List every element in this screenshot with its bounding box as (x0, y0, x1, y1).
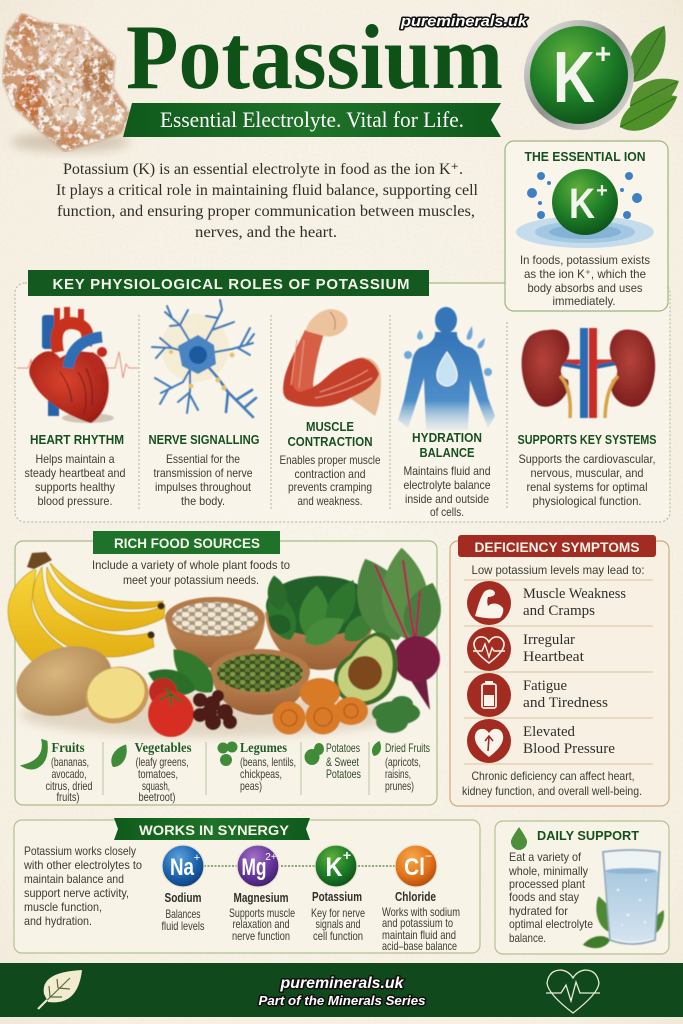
element: magnesium: relaxation and (232, 917, 290, 931)
element: potassium: K (326, 852, 343, 882)
element: sodium (162, 845, 204, 933)
icon: K+ sphere on water: + (596, 180, 608, 202)
role: heart rhythm: HEART RHYTHM (30, 432, 124, 447)
icon: K+ badge with leaves: + (595, 38, 611, 69)
spinach bowl (265, 610, 376, 670)
icon: green drop (511, 827, 527, 850)
element: chloride: Works with sodium (382, 905, 460, 919)
role: nerve signalling: impulses throughout (155, 480, 252, 494)
food group: dried fruits: Dried Fruits (385, 741, 430, 755)
panel: works in synergy (14, 818, 480, 953)
symptom: elevated blood pressure: Elevated (523, 724, 576, 740)
icon: footer heart ECG (546, 970, 600, 1013)
element: sodium: Balances (166, 907, 200, 921)
element: sodium: Na (170, 854, 195, 881)
symptom: elevated blood pressure (467, 719, 615, 763)
raisins (193, 690, 237, 730)
synergy text: and hydration. (24, 914, 92, 928)
symptom: irregular heartbeat (467, 627, 584, 671)
element: potassium: Potassium (312, 890, 362, 904)
intro paragraph: function, and ensuring proper communication between muscles, (57, 203, 475, 220)
daily support text: Eat a variety of (509, 850, 582, 864)
food group: legumes: Legumes (240, 741, 287, 756)
food group: legumes: (beans, lentils, (240, 755, 296, 769)
food group: potatoes: Potatoes (326, 741, 360, 755)
food group: potatoes (304, 741, 361, 781)
deficiency footer note (462, 769, 642, 798)
footer bar (0, 963, 683, 1017)
role: muscle contraction: contraction and (294, 467, 366, 481)
herbs (372, 696, 420, 733)
element: chloride: Cl (404, 854, 425, 881)
daily support text: hydrated for (509, 904, 568, 918)
element: sodium: + (194, 852, 200, 864)
daily support text: optimal electrolyte (509, 917, 593, 931)
role: muscle contraction: prevents cramping (288, 480, 372, 494)
footer website: pureminerals.uk (279, 975, 405, 992)
element: magnesium: Mg (242, 854, 266, 881)
element: magnesium: nerve function (232, 929, 290, 943)
role: hydration balance: Maintains fluid and (404, 464, 490, 478)
role: hydration balance: of cells. (430, 505, 464, 519)
symptom: fatigue (467, 673, 608, 717)
element: magnesium: 2+ (265, 852, 277, 863)
ion panel text: body absorbs and uses (528, 281, 642, 295)
intro paragraph: nerves, and the heart. (195, 224, 337, 241)
title: Potassium (126, 6, 503, 108)
element: potassium (311, 845, 365, 943)
element: chloride: and potassium to (382, 916, 453, 930)
potatoes (7, 634, 121, 728)
daily support heading: DAILY SUPPORT (537, 828, 639, 843)
food intro text: meet your potassium needs. (123, 573, 259, 587)
daily support text (508, 850, 593, 945)
role: hydration balance: electrolyte balance (404, 478, 491, 492)
website label: pureminerals.uk (400, 14, 528, 30)
subtitle text: Essential Electrolyte. Vital for Life. (160, 107, 464, 132)
food group: fruits: fruits) (56, 790, 80, 804)
role: hydration balance: HYDRATION (412, 430, 482, 445)
subtitle ribbon (123, 103, 501, 137)
food group: vegetables: squash, (142, 779, 170, 793)
intro paragraph: Potassium (K) is an essential electrolyte in food as the ion K⁺. (63, 161, 463, 178)
role: supports key systems: renal systems for optimal (526, 480, 648, 494)
role: heart rhythm: supports healthy (35, 480, 115, 494)
symptom: fatigue: and Tiredness (523, 695, 608, 711)
role: nerve signalling: NERVE SIGNALLING (148, 432, 260, 447)
synergy text (23, 844, 142, 928)
role: heart rhythm: blood pressure. (38, 494, 112, 508)
icon: heart (17, 307, 138, 423)
food group: potatoes: Potatoes (326, 767, 361, 781)
deficiency heading banner (458, 535, 656, 557)
synergy text: maintain balance and (24, 872, 124, 886)
panel: deficiency symptoms (450, 535, 669, 806)
icon: footer leaf (38, 970, 82, 1009)
element: sodium: Sodium (164, 891, 202, 905)
element: chloride: Chloride (395, 890, 436, 904)
element: chloride (382, 845, 460, 953)
deficiency heading banner: DEFICIENCY SYMPTOMS (474, 539, 640, 555)
ion panel heading: THE ESSENTIAL ION (524, 149, 646, 164)
element: magnesium: Magnesium (234, 891, 288, 905)
footer series line: Part of the Minerals Series (258, 994, 426, 1008)
food group: legumes (218, 741, 296, 793)
food group: fruits: citrus, dried (46, 779, 92, 793)
daily support text: processed plant (509, 877, 586, 891)
symptom: muscle weakness: Muscle Weakness (523, 586, 626, 602)
role: hydration balance (404, 430, 491, 519)
synergy heading ribbon: WORKS IN SYNERGY (139, 822, 290, 838)
symptom: muscle weakness (467, 581, 626, 625)
beetroot (343, 546, 450, 710)
icon: potassium mineral rock (2, 13, 130, 152)
food group: vegetables: tomatoes, (138, 767, 178, 781)
symptom: muscle weakness: and Cramps (523, 603, 595, 619)
ion panel text: as the ion K⁺, which the (524, 267, 646, 281)
role: hydration balance: BALANCE (420, 445, 475, 460)
panel: daily support (495, 821, 669, 954)
symptom: irregular heartbeat: Irregular (523, 632, 575, 648)
icon: K+ badge with leaves (524, 19, 683, 140)
element: chloride: − (425, 849, 432, 863)
element: chloride: maintain fluid and (382, 928, 456, 942)
icon: leaf (108, 741, 131, 770)
role: nerve signalling: the body. (181, 494, 225, 508)
ion panel text: In foods, potassium exists (520, 253, 650, 267)
icon: banana (24, 741, 46, 768)
food group: dried fruits: raisins, (385, 767, 411, 781)
panel: key physiological roles (15, 270, 670, 522)
synergy text: support nerve activity, (24, 886, 129, 900)
role: heart rhythm: Helps maintain a (36, 452, 115, 466)
intro paragraph: It plays a critical role in maintaining fluid balance, supporting cell (56, 182, 478, 199)
food heading banner: RICH FOOD SOURCES (114, 535, 260, 551)
icon: water glass with leaves (582, 850, 668, 950)
role: muscle contraction: and weakness. (298, 494, 362, 508)
role: muscle contraction: Enables proper muscle (280, 453, 381, 467)
role: supports key systems: physiological function. (532, 494, 642, 508)
food group: legumes: chickpeas, (240, 767, 282, 781)
food intro text (92, 558, 290, 587)
symptom: irregular heartbeat: Heartbeat (523, 649, 584, 665)
icon: K+ sphere on water: K (569, 180, 595, 228)
ion panel text: immediately. (552, 294, 616, 308)
food group: vegetables: (leafy greens, (136, 755, 188, 769)
food heading banner (93, 531, 280, 554)
symptom: elevated blood pressure: Blood Pressure (523, 741, 615, 757)
food group: fruits: (bananas, (51, 755, 89, 769)
mung bean bowl (211, 670, 310, 715)
role: supports key systems (518, 432, 657, 508)
apricots (272, 678, 368, 734)
role: muscle contraction: MUSCLE (306, 419, 354, 434)
synergy text: muscle function, (24, 900, 102, 914)
icon: K+ sphere on water (516, 169, 654, 248)
icon: beans (218, 742, 238, 766)
food group: vegetables: Vegetables (134, 741, 192, 756)
element: sodium: fluid levels (162, 919, 204, 933)
food group: fruits (24, 741, 92, 804)
role: supports key systems: SUPPORTS KEY SYSTEMS (518, 432, 657, 447)
synergy text: Potassium works closely (24, 844, 136, 858)
symptom: fatigue: Fatigue (523, 678, 567, 694)
food group: dried fruits: (apricots, (385, 755, 421, 769)
role: nerve signalling: transmission of nerve (154, 466, 253, 480)
icon: K+ badge with leaves: K (553, 38, 595, 118)
ion panel text (520, 253, 650, 308)
daily support text: balance. (509, 931, 546, 945)
element: magnesium: Supports muscle (229, 906, 295, 920)
food group: fruits: avocado, (52, 767, 86, 781)
avocado (334, 632, 398, 705)
icon: flexed muscle arm (283, 309, 381, 416)
deficiency footer note: kidney function, and overall well-being. (462, 784, 642, 798)
food group: vegetables (108, 741, 192, 804)
element: potassium: + (343, 847, 351, 863)
deficiency intro text: Low potassium levels may lead to: (472, 563, 644, 577)
element: chloride: acid–base balance (382, 939, 457, 953)
role: heart rhythm: steady heartbeat and (24, 466, 126, 480)
salad leaves (144, 640, 222, 701)
element: magnesium (229, 845, 295, 943)
bean bowl (166, 620, 265, 668)
food group: potatoes: & Sweet (326, 755, 359, 769)
icon: small leaf (370, 740, 383, 757)
role: supports key systems: nervous, muscular, and (530, 466, 644, 480)
roles heading banner: KEY PHYSIOLOGICAL ROLES OF POTASSIUM (52, 276, 410, 293)
element: potassium: signals and (316, 917, 360, 931)
role: nerve signalling: Essential for the (166, 452, 240, 466)
food intro text: Include a variety of whole plant foods to (92, 558, 290, 572)
roles heading banner (28, 270, 429, 296)
role: muscle contraction (280, 419, 381, 508)
role: muscle contraction: CONTRACTION (288, 434, 372, 449)
daily support text: whole, minimally (508, 864, 588, 878)
panel: the essential ion (505, 141, 668, 311)
bananas (8, 563, 165, 666)
synergy text: with other electrolytes to (23, 858, 142, 872)
icon: kidneys (522, 328, 655, 418)
role: heart rhythm (24, 432, 126, 508)
element: potassium: Key for nerve (311, 906, 365, 920)
icon: body hydration (398, 307, 495, 430)
food group: dried fruits: prunes) (385, 779, 414, 793)
food group: vegetables: beetroot) (138, 790, 176, 804)
daily support text: foods and stay (509, 890, 579, 904)
intro paragraph (56, 161, 478, 241)
food illustration (7, 546, 450, 737)
synergy heading ribbon (114, 818, 310, 840)
role: hydration balance: inside and outside (405, 492, 489, 506)
role: supports key systems: Supports the cardiovascular, (518, 452, 656, 466)
tomatoes (149, 678, 177, 706)
role: nerve signalling (148, 432, 260, 508)
food group: dried fruits (370, 740, 430, 793)
food group: legumes: peas) (240, 779, 262, 793)
deficiency footer note: Chronic deficiency can affect heart, (472, 769, 634, 783)
icon: potato (304, 743, 324, 765)
panel: rich food sources (7, 531, 450, 805)
icon: neuron (152, 300, 256, 417)
food group: fruits: Fruits (52, 741, 85, 756)
element: potassium: cell function (313, 929, 363, 943)
